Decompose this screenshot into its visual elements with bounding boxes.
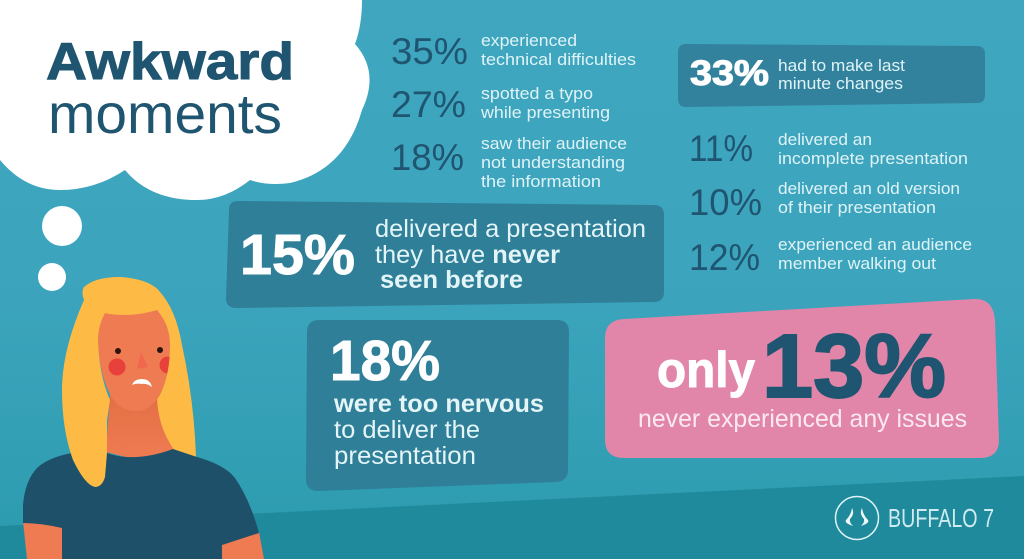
stat: 18% audience not understanding: saw their audience — [481, 134, 627, 153]
cheeks — [108, 356, 170, 376]
thought bubble small — [38, 263, 66, 291]
panel: only 13%: never experienced any issues — [638, 405, 967, 433]
stat: 35% technical difficulties: experienced — [481, 31, 577, 50]
face — [98, 310, 170, 411]
stat: 18% audience not understanding: not understanding — [481, 153, 625, 172]
shirt — [23, 449, 259, 559]
stat: 11% incomplete: 11% — [689, 128, 753, 169]
panel: only 13%: only — [657, 342, 755, 398]
panel: 33% last minute changes: minute changes — [778, 74, 903, 93]
panel: only 13%: 13% — [762, 317, 946, 417]
logo: Buffalo 7 — [836, 496, 994, 540]
panel: 18% too nervous — [306, 320, 569, 491]
panel: 33% last minute changes — [678, 44, 985, 107]
hair front left — [62, 277, 158, 487]
arm left — [23, 521, 63, 559]
panel: 15% never seen before: they have never — [375, 241, 560, 269]
thought cloud — [0, 0, 370, 200]
stat: 27% typo: while presenting — [480, 103, 610, 122]
stat: 10% old version — [689, 179, 960, 223]
stat: 10% old version: of their presentation — [778, 198, 936, 217]
panel: 15% never seen before: delivered a presentation — [375, 215, 646, 243]
logo: Buffalo 7: BUFFALO 7 — [888, 503, 994, 533]
nose — [137, 352, 148, 369]
stat: 18% audience not understanding: the information — [481, 172, 601, 191]
stat: 27% typo: spotted a typo — [481, 84, 593, 103]
floor band — [0, 476, 1024, 559]
arm right — [222, 532, 264, 559]
title: moments — [48, 82, 282, 145]
stat: 27% typo — [391, 84, 610, 125]
stat: 10% old version: delivered an old version — [778, 179, 960, 198]
thought bubble large — [42, 206, 82, 246]
panel: 15% never seen before: seen before — [380, 266, 523, 294]
title: Awkward — [46, 33, 294, 91]
panel: 15% never seen before: 15% — [240, 223, 355, 287]
panel: 33% last minute changes: had to make last — [778, 56, 905, 75]
woman figure — [23, 277, 264, 559]
stat: 10% old version: 10% — [689, 182, 762, 223]
stat: 35% technical difficulties: technical difficulties — [481, 50, 636, 69]
stat: 12% walking out: experienced an audience — [778, 235, 972, 254]
panel: only 13% — [605, 299, 999, 458]
stat: 35% technical difficulties — [391, 31, 636, 72]
stat: 12% walking out: 12% — [689, 237, 760, 278]
panel: 18% too nervous: were too nervous — [333, 390, 544, 418]
stat: 18% audience not understanding — [391, 134, 627, 191]
stat: 11% incomplete: delivered an — [778, 130, 872, 149]
panel: 18% too nervous: to deliver the — [334, 416, 480, 444]
stat: 27% typo: 27% — [391, 84, 466, 125]
neck — [106, 395, 174, 458]
stat: 18% audience not understanding: 18% — [391, 137, 464, 178]
stat: 12% walking out — [689, 235, 972, 278]
panel: 18% too nervous: presentation — [334, 442, 476, 470]
stat: 11% incomplete — [689, 128, 968, 169]
panel: 33% last minute changes: 33% — [690, 54, 769, 93]
stat: 11% incomplete: incomplete presentation — [778, 149, 968, 168]
hair back — [84, 277, 196, 457]
mouth — [132, 379, 152, 387]
panel: 18% too nervous: 18% — [330, 329, 440, 393]
eyes — [115, 347, 163, 354]
stat: 35% technical difficulties: 35% — [391, 31, 468, 72]
stat: 12% walking out: member walking out — [778, 254, 936, 273]
title — [46, 33, 294, 145]
panel: 15% never seen before — [226, 201, 664, 308]
